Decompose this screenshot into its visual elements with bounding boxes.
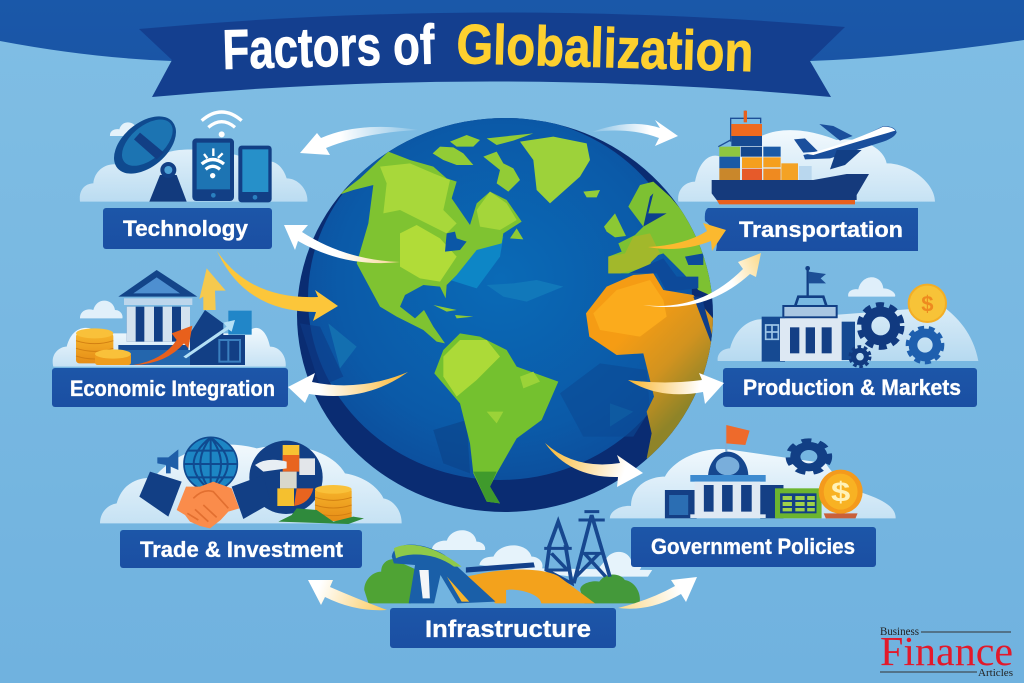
small cloud bbox=[848, 277, 895, 297]
dark house and chart bbox=[190, 310, 252, 365]
Trade & Investment label bbox=[120, 530, 362, 568]
satellite dish bbox=[103, 105, 187, 202]
patterned globe bbox=[249, 441, 323, 514]
ocean bbox=[308, 116, 692, 480]
right cuff bbox=[232, 475, 271, 519]
logo word: Finance: Finance bbox=[880, 628, 1013, 674]
coin: $ bbox=[921, 291, 933, 316]
arrow: Technology to globe bbox=[217, 251, 338, 321]
Iceland bbox=[583, 190, 600, 197]
Technology icon bbox=[80, 105, 307, 202]
blue mark bbox=[157, 449, 178, 473]
Black Sea and Mediterranean bbox=[628, 253, 703, 292]
Production & Markets label bbox=[723, 368, 977, 407]
arrow: globe to Government Policies bbox=[545, 443, 643, 487]
orange growth arrow bbox=[133, 326, 192, 365]
Government Policies icon bbox=[610, 425, 896, 518]
title ribbon bbox=[139, 12, 845, 97]
panel: Technology bbox=[80, 105, 307, 249]
title text: Factors of: Factors of bbox=[222, 12, 436, 81]
Trade & Investment icon bbox=[100, 437, 402, 528]
factory building bbox=[762, 266, 855, 362]
clouds bbox=[53, 328, 286, 367]
handshake bbox=[177, 482, 239, 528]
green policy panel bbox=[775, 488, 822, 518]
cloud bbox=[718, 307, 978, 361]
Technology label bbox=[103, 208, 272, 249]
Government Policies label: Government Policies bbox=[651, 534, 855, 559]
Economic Integration icon bbox=[53, 268, 286, 367]
arrow: globe to Economic Integration bbox=[288, 372, 408, 403]
large gear bbox=[859, 305, 902, 347]
wire globe bbox=[184, 437, 237, 491]
globe bbox=[297, 116, 720, 512]
North America bbox=[338, 152, 522, 343]
arrow: top left white bbox=[300, 127, 418, 155]
capitol building bbox=[665, 425, 783, 518]
airplane bbox=[794, 124, 897, 169]
Newfoundland and Caribbean bbox=[433, 228, 523, 318]
Production & Markets icon bbox=[718, 266, 978, 367]
Transportation label: Transportation bbox=[739, 217, 903, 242]
South America bbox=[434, 333, 558, 503]
light growth arrow bbox=[183, 320, 235, 358]
Trade & Investment label: Trade & Investment bbox=[140, 537, 344, 562]
clouds bbox=[432, 530, 652, 577]
Production & Markets label: Production & Markets bbox=[743, 375, 961, 400]
orange deck bbox=[466, 570, 595, 603]
cloud bbox=[80, 149, 307, 202]
coin stack bbox=[315, 485, 352, 521]
Iberia and southern Europe tint bbox=[608, 233, 660, 273]
Infrastructure label bbox=[390, 608, 616, 648]
tablet bbox=[192, 138, 234, 201]
small cloud bbox=[110, 122, 143, 136]
left cuff bbox=[139, 472, 182, 517]
Transportation label bbox=[705, 208, 918, 251]
Arctic islands bbox=[433, 133, 533, 192]
title text: Globalization: Globalization bbox=[456, 12, 754, 83]
blue gear bbox=[908, 328, 942, 362]
cloud bbox=[610, 449, 896, 518]
Government Policies label bbox=[631, 527, 876, 567]
cloud bbox=[100, 445, 402, 523]
gear bbox=[789, 441, 828, 472]
arrow: Infrastructure to Government Policies bbox=[618, 577, 697, 609]
panel: Production & Markets bbox=[718, 266, 978, 407]
logo word: Articles: Articles bbox=[978, 667, 1013, 679]
logo word: Business: Business bbox=[880, 624, 919, 638]
panel: Trade & Investment bbox=[100, 437, 402, 568]
coin stacks bbox=[76, 328, 131, 365]
arrow: globe to Technology bbox=[284, 225, 400, 263]
arrow: globe to Production & Markets bbox=[628, 373, 724, 404]
arrow: globe to Transportation bbox=[648, 223, 726, 251]
green bush bbox=[278, 508, 364, 524]
right bushes bbox=[580, 575, 640, 603]
coin: $ bbox=[831, 477, 850, 508]
logo rule top bbox=[921, 632, 1011, 633]
Europe bbox=[608, 182, 713, 297]
panel: Transportation bbox=[678, 111, 935, 251]
Economic Integration label bbox=[52, 368, 288, 407]
Economic Integration label: Economic Integration bbox=[70, 376, 275, 401]
UK and Ireland bbox=[604, 213, 626, 237]
cargo ship bbox=[712, 111, 869, 204]
panel: Economic Integration bbox=[52, 268, 288, 407]
ocean light patches bbox=[300, 237, 650, 473]
arrow: top right white bbox=[592, 120, 678, 146]
Infrastructure icon bbox=[364, 512, 652, 603]
bank building bbox=[110, 270, 197, 365]
logo rule bottom bbox=[880, 672, 977, 673]
railing bbox=[466, 562, 535, 573]
small gear bbox=[850, 347, 870, 367]
panel: Government Policies bbox=[610, 425, 896, 567]
blue bridge bbox=[392, 545, 496, 603]
arrow: Infrastructure to Trade & Investment bbox=[308, 580, 387, 610]
Technology label: Technology bbox=[123, 216, 249, 241]
smartphone bbox=[238, 146, 272, 202]
coin bbox=[909, 285, 946, 322]
wifi signal bbox=[202, 112, 242, 127]
panel: Infrastructure bbox=[364, 512, 652, 648]
Infrastructure label: Infrastructure bbox=[425, 616, 591, 643]
Africa bbox=[586, 273, 720, 458]
Transportation icon bbox=[678, 111, 935, 204]
top banner band bbox=[0, 0, 1024, 61]
Baltic Sea bbox=[643, 193, 667, 227]
small cloud bbox=[80, 301, 123, 318]
yellow up arrow bbox=[199, 268, 226, 310]
arrow: globe up to Transportation bbox=[643, 253, 761, 307]
logo: Business Finance Articles bbox=[880, 624, 1013, 679]
oil towers bbox=[544, 512, 610, 583]
Greenland bbox=[520, 137, 590, 203]
left bushes bbox=[364, 559, 417, 603]
cloud bbox=[678, 130, 935, 202]
coin bbox=[819, 470, 863, 518]
